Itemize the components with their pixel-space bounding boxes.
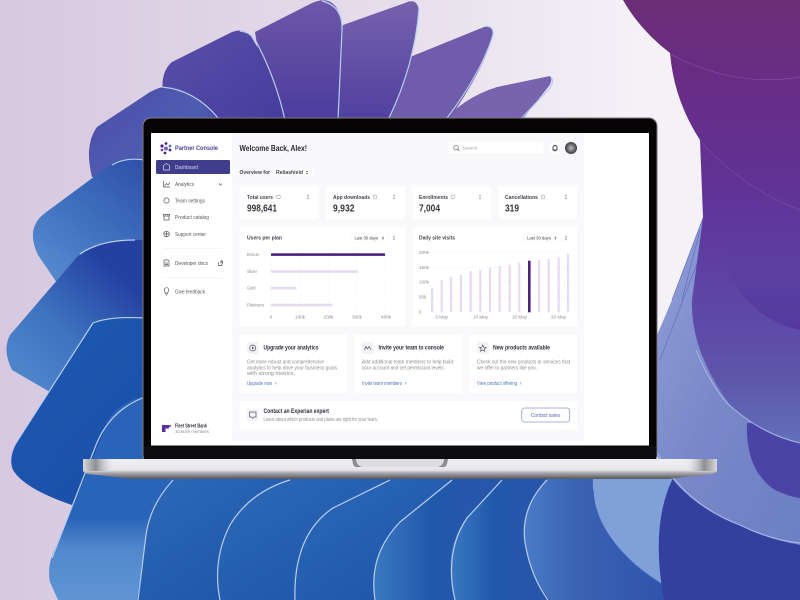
heading: Welcome Back, Alex! xyxy=(240,144,307,153)
sidebar navigation: Team settings xyxy=(175,198,205,204)
card: new products available: we offer to partners like you. xyxy=(477,365,537,371)
sidebar logo: Partner Console xyxy=(175,145,218,152)
contact banner: Contact an Experian expert xyxy=(264,409,329,415)
sidebar logo xyxy=(160,142,218,154)
panel: users per plan: Users per plan xyxy=(247,236,282,242)
horizontal bar chart: Bronze xyxy=(247,252,260,257)
laptop screen xyxy=(151,133,649,446)
column chart: 100k xyxy=(419,280,430,285)
button: contact sales xyxy=(522,408,570,422)
card: upgrade your analytics: Upgrade now xyxy=(247,381,272,387)
stat card: cancellations xyxy=(498,186,577,219)
stat card: enrollments: 7,004 xyxy=(419,204,440,214)
card: new products available: Check out the new products or services that xyxy=(477,359,570,365)
laptop lid xyxy=(143,118,657,463)
sidebar account: 10 team members xyxy=(175,429,210,435)
sidebar navigation: Give feedback xyxy=(175,290,205,296)
panel: users per plan: Last 30 days xyxy=(354,236,379,242)
panel: daily site visits xyxy=(412,227,577,326)
contact banner: Learn about which products and plans are right for your team. xyxy=(264,417,378,423)
search box xyxy=(448,142,544,154)
background: lower right discs xyxy=(593,218,800,600)
horizontal bar chart xyxy=(247,252,392,320)
horizontal bar chart: 400k xyxy=(381,315,392,320)
column chart: 15 May xyxy=(512,315,528,320)
contact banner xyxy=(240,401,577,429)
main content background xyxy=(232,133,584,441)
column chart: 10 May xyxy=(473,315,489,320)
card: upgrade your analytics: Get more robust and comprehensive xyxy=(247,359,324,365)
background: purple swirl right xyxy=(623,0,800,443)
button: contact sales: Contact sales xyxy=(531,413,560,419)
stat card: total users: Total users xyxy=(247,195,273,201)
stat card: app downloads: 9,932 xyxy=(333,204,355,214)
sidebar account xyxy=(162,423,210,435)
notification icon xyxy=(550,142,560,154)
horizontal bar chart: Platinum xyxy=(247,303,264,308)
column chart: 200k xyxy=(419,250,430,255)
laptop base xyxy=(83,459,717,479)
stat card: total users: 998,641 xyxy=(247,204,277,214)
sidebar account: Fleet Street Bank xyxy=(175,423,207,429)
stat card: cancellations: 319 xyxy=(505,204,519,214)
column chart: 150k xyxy=(419,265,430,270)
column chart xyxy=(419,250,569,320)
sidebar navigation: Support center xyxy=(175,232,206,238)
card: new products available: New products available xyxy=(493,346,551,352)
stat card: cancellations: Cancellations xyxy=(505,195,538,201)
card: invite your team: Add additional team members to help build xyxy=(362,359,453,365)
horizontal bar chart: Silver xyxy=(247,269,257,274)
sidebar navigation: Dashboard xyxy=(175,165,198,171)
stat card: app downloads: App downloads xyxy=(333,195,370,201)
trackpad notch xyxy=(352,459,448,467)
card: upgrade your analytics: with strong metrics. xyxy=(247,371,295,377)
card: upgrade your analytics: analytics to help drive your business goals xyxy=(247,365,337,371)
horizontal bar chart: 100k xyxy=(295,315,306,320)
column chart: 20 May xyxy=(551,315,567,320)
card: invite your team: Invite team members xyxy=(362,381,402,387)
card: new products available xyxy=(470,334,577,393)
sidebar navigation: Developer docs xyxy=(175,261,208,267)
sidebar navigation: Product catalog xyxy=(175,215,209,221)
overview selector: Reliashield xyxy=(276,170,304,176)
card: upgrade your analytics xyxy=(240,334,348,393)
card: new products available: View product offering xyxy=(477,381,517,387)
sidebar navigation xyxy=(156,160,230,296)
stat card: enrollments xyxy=(412,186,491,219)
avatar xyxy=(565,142,577,154)
stat card: enrollments: Enrollments xyxy=(419,195,448,201)
card: invite your team: Invite your team to console xyxy=(378,346,445,352)
card: invite your team xyxy=(354,334,462,393)
card: upgrade your analytics: Upgrade your analytics xyxy=(264,346,319,352)
column chart: 50k xyxy=(419,295,427,300)
stat card: total users xyxy=(240,186,318,219)
horizontal bar chart: Gold xyxy=(247,286,256,291)
panel: daily site visits: Daily site visits xyxy=(419,236,455,242)
column chart: 5 May xyxy=(435,315,449,320)
panel: daily site visits: Last 30 days xyxy=(527,236,552,242)
background: left petals xyxy=(6,158,300,600)
stat card: app downloads xyxy=(326,186,405,219)
sidebar navigation: Analytics xyxy=(175,182,194,188)
column chart: 0 xyxy=(419,310,422,315)
card: invite your team: your account and set permission levels. xyxy=(362,365,445,371)
horizontal bar chart: 300k xyxy=(352,315,363,320)
horizontal bar chart: 0 xyxy=(270,315,273,320)
horizontal bar chart: 200k xyxy=(324,315,334,320)
search box: Search... xyxy=(462,146,481,152)
panel: users per plan xyxy=(240,227,405,326)
overview selector: Overview for xyxy=(240,170,271,176)
overview selector xyxy=(240,168,313,176)
background: top petals xyxy=(89,0,552,200)
background: bottom petals xyxy=(137,478,700,600)
